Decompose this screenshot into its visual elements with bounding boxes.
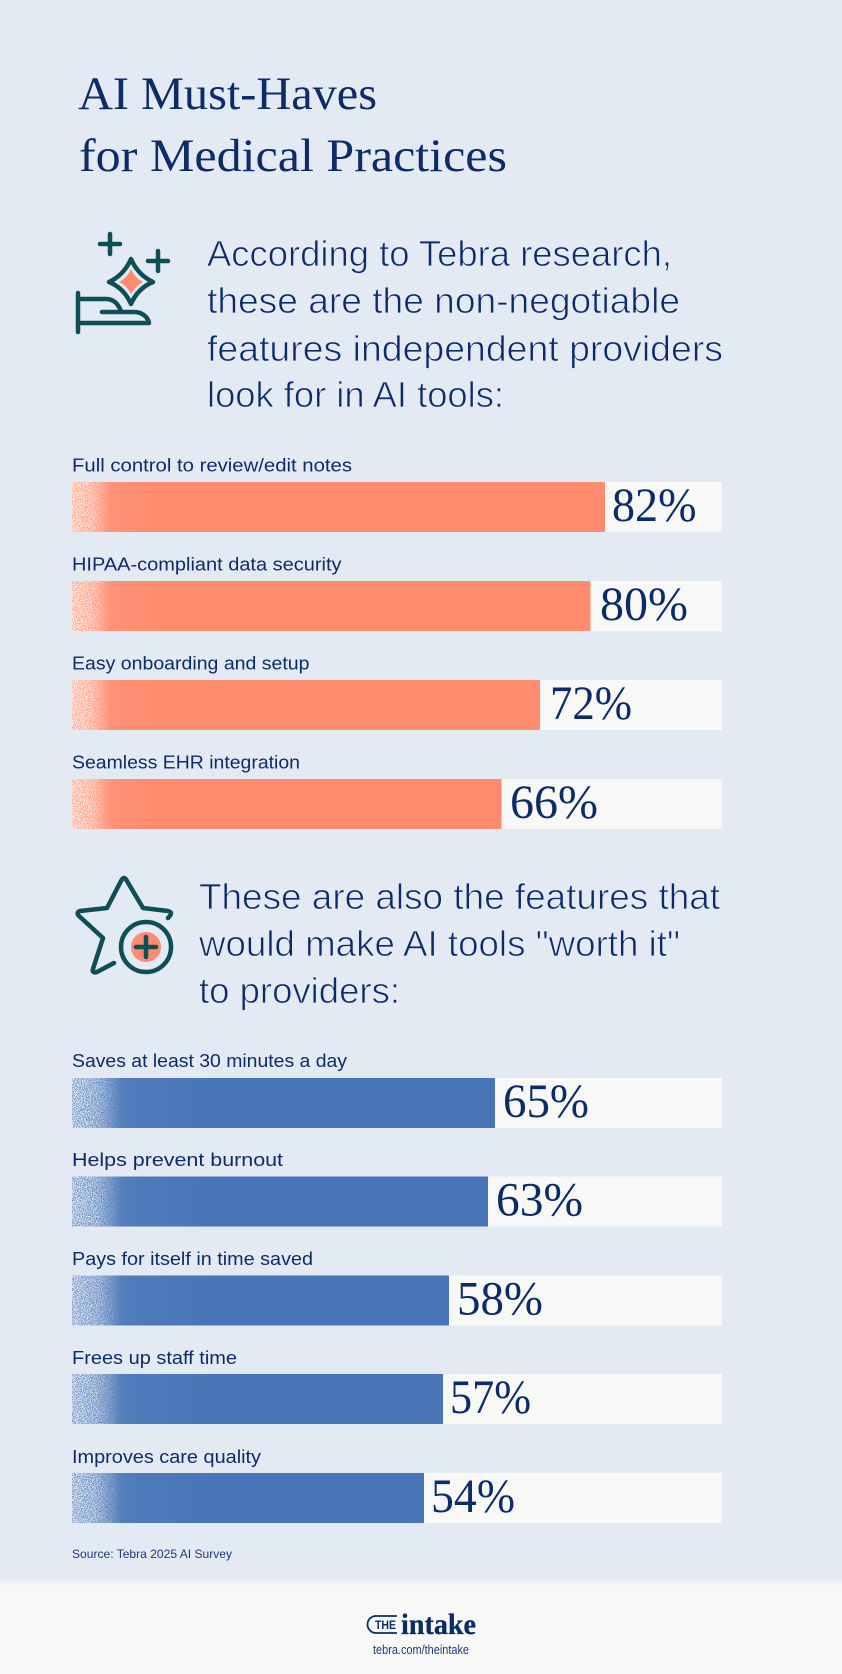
logo: The Intake: THE (375, 1618, 396, 1632)
bar: Saves at least 30 minutes a day 65% (72, 1051, 722, 1128)
title (78, 68, 507, 182)
bar: HIPAA-compliant data security 80%: HIPAA-compliant data security (72, 554, 342, 574)
logo: The Intake (368, 1608, 476, 1641)
logo: The Intake: intake (401, 1608, 476, 1641)
bar: Saves at least 30 minutes a day 65%: Saves at least 30 minutes a day (72, 1051, 347, 1071)
intro text: features independent providers (207, 328, 723, 369)
bar: Helps prevent burnout 63%: Helps prevent burnout (72, 1150, 283, 1170)
icon: star with plus badge (78, 878, 171, 972)
bar: Saves at least 30 minutes a day 65%: 65% (503, 1075, 589, 1128)
intro text: look for in AI tools: (207, 374, 504, 415)
bar: Frees up staff time 57%: Frees up staff time (72, 1348, 237, 1368)
bar: Helps prevent burnout 63% (72, 1150, 722, 1226)
bar: HIPAA-compliant data security 80%: 80% (600, 578, 688, 631)
title: for Medical Practices (79, 130, 507, 182)
bar: Full control to review/edit notes 82%: Full control to review/edit notes (72, 456, 352, 476)
icon: hand with sparkle (78, 234, 168, 332)
bar: Pays for itself in time saved 58%: Pays for itself in time saved (72, 1249, 313, 1269)
bar: HIPAA-compliant data security 80% (72, 554, 722, 631)
footer url: tebra.com/theintake (373, 1643, 469, 1657)
second heading text (198, 876, 720, 1011)
bar chart: worth-it features (72, 1051, 722, 1523)
title: AI Must-Haves (78, 68, 377, 120)
intro text: these are the non-negotiable (207, 280, 680, 321)
bar: Seamless EHR integration 66% (72, 752, 722, 829)
footer band (0, 1578, 842, 1674)
bar: Frees up staff time 57% (72, 1348, 722, 1424)
bar: Easy onboarding and setup 72% (72, 654, 722, 730)
bar: Improves care quality 54%: Improves care quality (72, 1447, 261, 1467)
bar: Improves care quality 54% (72, 1447, 722, 1523)
bar chart: non-negotiable features (72, 456, 722, 829)
bar: Improves care quality 54%: 54% (431, 1470, 515, 1523)
bar: Pays for itself in time saved 58% (72, 1249, 722, 1326)
second heading text: These are also the features that (199, 876, 720, 917)
bar: Seamless EHR integration 66%: Seamless EHR integration (72, 752, 300, 772)
bar: Easy onboarding and setup 72%: Easy onboarding and setup (72, 654, 310, 674)
second heading text: to providers: (199, 970, 400, 1011)
bar: Helps prevent burnout 63%: 63% (496, 1174, 583, 1226)
bar: Full control to review/edit notes 82% (72, 456, 722, 532)
bar: Pays for itself in time saved 58%: 58% (457, 1272, 543, 1326)
bar: Full control to review/edit notes 82%: 82% (612, 479, 696, 532)
intro text: According to Tebra research, (207, 233, 672, 274)
second heading text: would make AI tools "worth it" (198, 923, 680, 964)
bar: Easy onboarding and setup 72%: 72% (550, 677, 632, 730)
bar: Frees up staff time 57%: 57% (450, 1371, 531, 1424)
source note: Source: Tebra 2025 AI Survey (72, 1547, 232, 1561)
bar: Seamless EHR integration 66%: 66% (510, 776, 598, 829)
intro text (207, 233, 723, 415)
